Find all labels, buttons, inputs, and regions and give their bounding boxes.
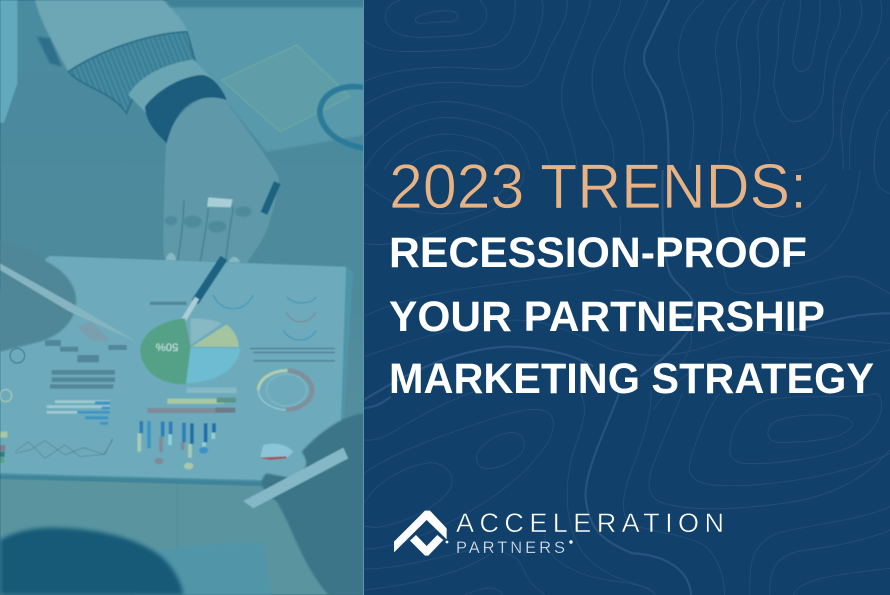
thin divider edge of photo xyxy=(363,0,364,595)
upper desk objects xyxy=(0,0,364,288)
bar grey xyxy=(187,388,237,393)
pie slice 15 percent xyxy=(192,324,239,347)
contours top xyxy=(364,0,890,171)
wrist xyxy=(128,59,211,112)
title line: recession-proof: RECESSION-PROOF xyxy=(389,229,807,277)
pie chart xyxy=(140,318,241,384)
hand xyxy=(163,97,278,263)
left hand with pen xyxy=(0,240,137,352)
line chart xyxy=(15,438,113,458)
logo wordmark: acceleration: ACCELERATION xyxy=(456,508,724,538)
title line: your partnership: YOUR PARTNERSHIP xyxy=(389,293,825,341)
sticky note xyxy=(222,45,350,132)
ring gauges at top xyxy=(0,295,317,402)
pie slice 50 percent xyxy=(140,318,191,384)
vertical bar chart xyxy=(139,421,214,458)
donut inner ring xyxy=(267,374,307,406)
panel: teal-tinted photo of hands reviewing charts xyxy=(0,0,364,595)
donut arc dark xyxy=(286,370,312,410)
icon: logo mark xyxy=(394,511,447,556)
pen behind hand xyxy=(264,183,277,213)
notebook at bottom xyxy=(133,543,272,595)
ring xyxy=(207,197,233,207)
donut chart xyxy=(258,370,312,410)
left hand xyxy=(0,240,76,352)
right pen xyxy=(243,448,348,508)
title line: marketing strategy: MARKETING STRATEGY xyxy=(389,355,874,403)
logo: acceleration partners xyxy=(394,508,724,557)
stacked horizontal bars xyxy=(147,388,237,413)
contours bottom xyxy=(364,390,890,595)
fingernails xyxy=(166,252,240,263)
lower desk shadow under report xyxy=(0,475,340,492)
top report page xyxy=(0,256,346,482)
blurred head in foreground xyxy=(0,528,183,595)
scissors handle xyxy=(320,87,364,148)
bar dark mauve xyxy=(215,408,235,413)
left edge object xyxy=(0,0,17,123)
dark top band xyxy=(167,0,364,7)
registered mark dots xyxy=(446,540,573,544)
report papers xyxy=(166,260,352,418)
bar chart markers xyxy=(154,447,208,469)
heading: 2023 trends: 2023 TRENDS: xyxy=(389,152,807,222)
pen in right hand xyxy=(195,258,224,302)
slider bars xyxy=(47,400,110,425)
hand silhouette xyxy=(163,97,278,262)
panel: navy background xyxy=(364,0,890,595)
dark text blocks xyxy=(45,302,335,389)
pie label: 50% xyxy=(156,340,178,352)
donut arc light xyxy=(258,370,287,390)
blue map detail xyxy=(260,444,293,458)
donut arc thin xyxy=(258,390,286,410)
dark watch band xyxy=(145,75,227,143)
lower-right hand xyxy=(262,413,364,595)
notebook at top right xyxy=(167,0,364,152)
knuckle shading xyxy=(164,206,252,233)
contours middle xyxy=(364,150,890,410)
knitted cuff xyxy=(68,32,195,113)
sleeve button shadow xyxy=(37,37,62,67)
pie slice 25 percent xyxy=(186,348,241,383)
jacket sleeve xyxy=(35,0,188,75)
topographic line pattern xyxy=(364,0,890,595)
plank seam xyxy=(176,483,178,548)
desk background xyxy=(0,0,364,595)
bar green xyxy=(217,398,236,403)
color swatches at left edge xyxy=(0,432,7,463)
bar yellow xyxy=(167,399,224,404)
red map detail xyxy=(258,456,287,460)
color swatches near pen xyxy=(77,322,110,342)
pie slice small xyxy=(191,318,222,345)
finger gaps xyxy=(177,200,234,261)
left pen xyxy=(0,263,137,342)
lower desk wood xyxy=(0,479,340,595)
pen tip xyxy=(183,298,197,321)
logo wordmark: partners: PARTNERS xyxy=(456,539,565,557)
bar mauve xyxy=(147,408,222,413)
chart details on report xyxy=(0,240,364,595)
